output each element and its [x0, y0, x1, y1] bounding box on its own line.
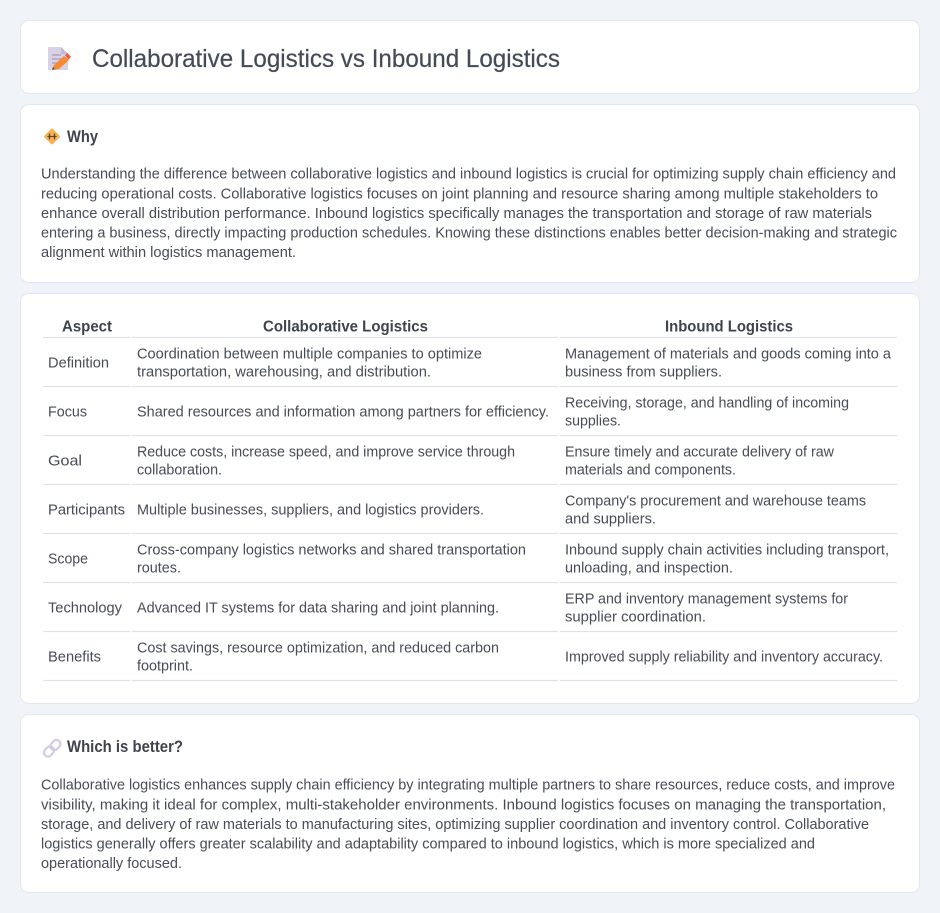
- text block: which is better: storage, and delivery of raw materials to manufacturing sites, optimizing supplier coordination and inventory control. Collaborative: [41, 817, 869, 833]
- row: focus: [48, 396, 849, 430]
- row: benefits: Benefits: [48, 650, 101, 666]
- row: participants: [48, 494, 866, 528]
- row: scope: Scope: [48, 552, 88, 568]
- row: technology: Advanced IT systems for data sharing and joint planning.: [137, 601, 499, 617]
- table header: Inbound Logistics: [665, 319, 793, 336]
- text block: why: reducing operational costs. Collaborative logistics focuses on joint planning and resource sharing among multiple stakeholders to: [41, 186, 878, 202]
- panel: header: [20, 20, 920, 94]
- row: goal: materials and components.: [565, 463, 736, 479]
- row: focus: Focus: [48, 405, 87, 421]
- panel: which is better: [20, 714, 920, 892]
- row: participants: Company's procurement and warehouse teams: [565, 494, 866, 510]
- row: benefits: Cost savings, resource optimization, and reduced carbon: [137, 641, 499, 657]
- text block: which is better: [41, 778, 895, 872]
- table header: [62, 319, 793, 336]
- row: technology: ERP and inventory management systems for: [565, 592, 848, 608]
- panel: comparison table: [20, 294, 920, 704]
- text block: which is better: operationally focused.: [41, 856, 182, 872]
- row: definition: Management of materials and goods coming into a: [565, 347, 891, 363]
- row: participants: Multiple businesses, suppliers, and logistics providers.: [137, 503, 484, 519]
- row: goal: [48, 445, 835, 479]
- row: technology: supplier coordination.: [565, 610, 706, 626]
- text block: which is better: logistics generally offers greater scalability and adaptability compared to inbound logistics, which is more specialized and: [41, 836, 815, 852]
- row: goal: Goal: [48, 454, 82, 470]
- row: benefits: Improved supply reliability and inventory accuracy.: [565, 650, 883, 666]
- text block: why: [41, 167, 897, 261]
- title: Collaborative Logistics vs Inbound Logistics: [92, 45, 560, 73]
- row: technology: [48, 592, 848, 626]
- row: focus: supplies.: [565, 414, 621, 430]
- row: definition: transportation, warehousing, and distribution.: [137, 365, 431, 381]
- icon: link: [42, 738, 62, 758]
- row: benefits: [48, 641, 883, 675]
- row: technology: Technology: [48, 601, 123, 617]
- icon: memo with pencil: [48, 47, 71, 70]
- row: definition: [48, 347, 891, 381]
- text block: why: alignment within logistics management.: [41, 245, 296, 261]
- icon: diamond sign: [44, 128, 60, 145]
- text block: why: enhance overall distribution performance. Inbound logistics specifically manages the transportation and storage of raw materials: [41, 206, 872, 222]
- heading: which is better: Which is better?: [67, 737, 183, 756]
- row: definition: business from suppliers.: [565, 365, 722, 381]
- row: participants: and suppliers.: [565, 512, 656, 528]
- row: scope: unloading, and inspection.: [565, 561, 733, 577]
- row: goal: Reduce costs, increase speed, and improve service through: [137, 445, 515, 461]
- row: definition: Definition: [48, 356, 109, 372]
- text block: why: Understanding the difference between collaborative logistics and inbound logistics is crucial for optimizing supply chain efficiency and: [41, 167, 896, 183]
- text block: why: entering a business, directly impacting production schedules. Knowing these distinctions enables better decision-making and strategic: [41, 226, 897, 242]
- row: participants: Participants: [48, 503, 125, 519]
- table header: Collaborative Logistics: [263, 319, 428, 336]
- heading: why: Why: [67, 127, 98, 146]
- row: scope: [48, 543, 889, 577]
- row: goal: Ensure timely and accurate delivery of raw: [565, 445, 835, 461]
- row: goal: collaboration.: [137, 463, 222, 479]
- table header: Aspect: [62, 319, 112, 336]
- row: scope: Cross-company logistics networks and shared transportation: [137, 543, 526, 559]
- row: scope: Inbound supply chain activities including transport,: [565, 543, 889, 559]
- panel: why: [20, 104, 920, 282]
- row: focus: Shared resources and information among partners for efficiency.: [137, 405, 549, 421]
- text block: which is better: Collaborative logistics enhances supply chain efficiency by integrating multiple partners to share resources, reduce costs, and improve: [41, 778, 895, 794]
- row: definition: Coordination between multiple companies to optimize: [137, 347, 482, 363]
- row: benefits: footprint.: [137, 659, 193, 675]
- row: scope: routes.: [137, 561, 181, 577]
- text block: which is better: visibility, making it ideal for complex, multi-stakeholder environments. Inbound logistics focuses on managing the transportation,: [41, 797, 886, 813]
- row: focus: Receiving, storage, and handling of incoming: [565, 396, 849, 412]
